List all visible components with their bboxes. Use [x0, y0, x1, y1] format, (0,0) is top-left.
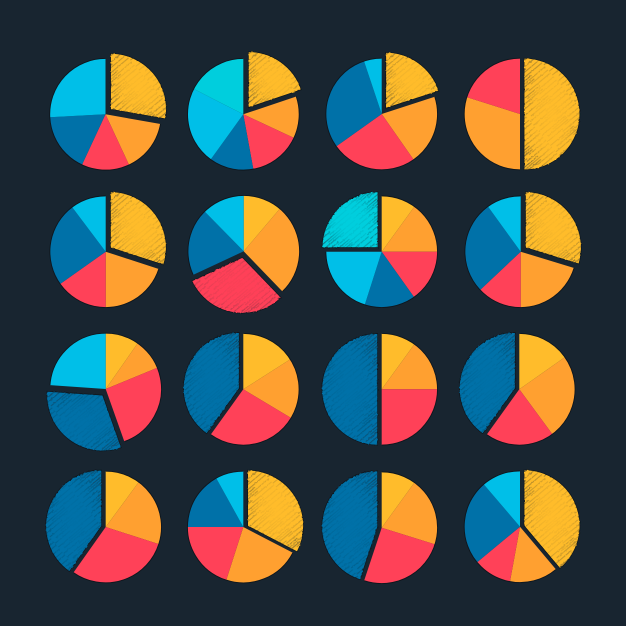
pie chart 6: [188, 195, 300, 313]
pie chart 3: [326, 52, 439, 170]
pie chart 1: [50, 53, 166, 170]
pie chart 2: [187, 52, 301, 170]
pie chart 11: [322, 333, 438, 445]
pie chart 8: [465, 192, 581, 308]
pie chart 9: [47, 333, 162, 451]
pie chart 10: [183, 332, 299, 445]
pie chart 15: [322, 471, 438, 584]
pie chart 13: [46, 470, 161, 583]
pie chart 16: [464, 470, 580, 583]
pie chart 14: [187, 470, 304, 583]
pie chart 12: [459, 332, 575, 445]
pie chart 5: [50, 192, 166, 308]
pie chart 7: [322, 192, 438, 308]
pie chart 4: [464, 58, 580, 170]
